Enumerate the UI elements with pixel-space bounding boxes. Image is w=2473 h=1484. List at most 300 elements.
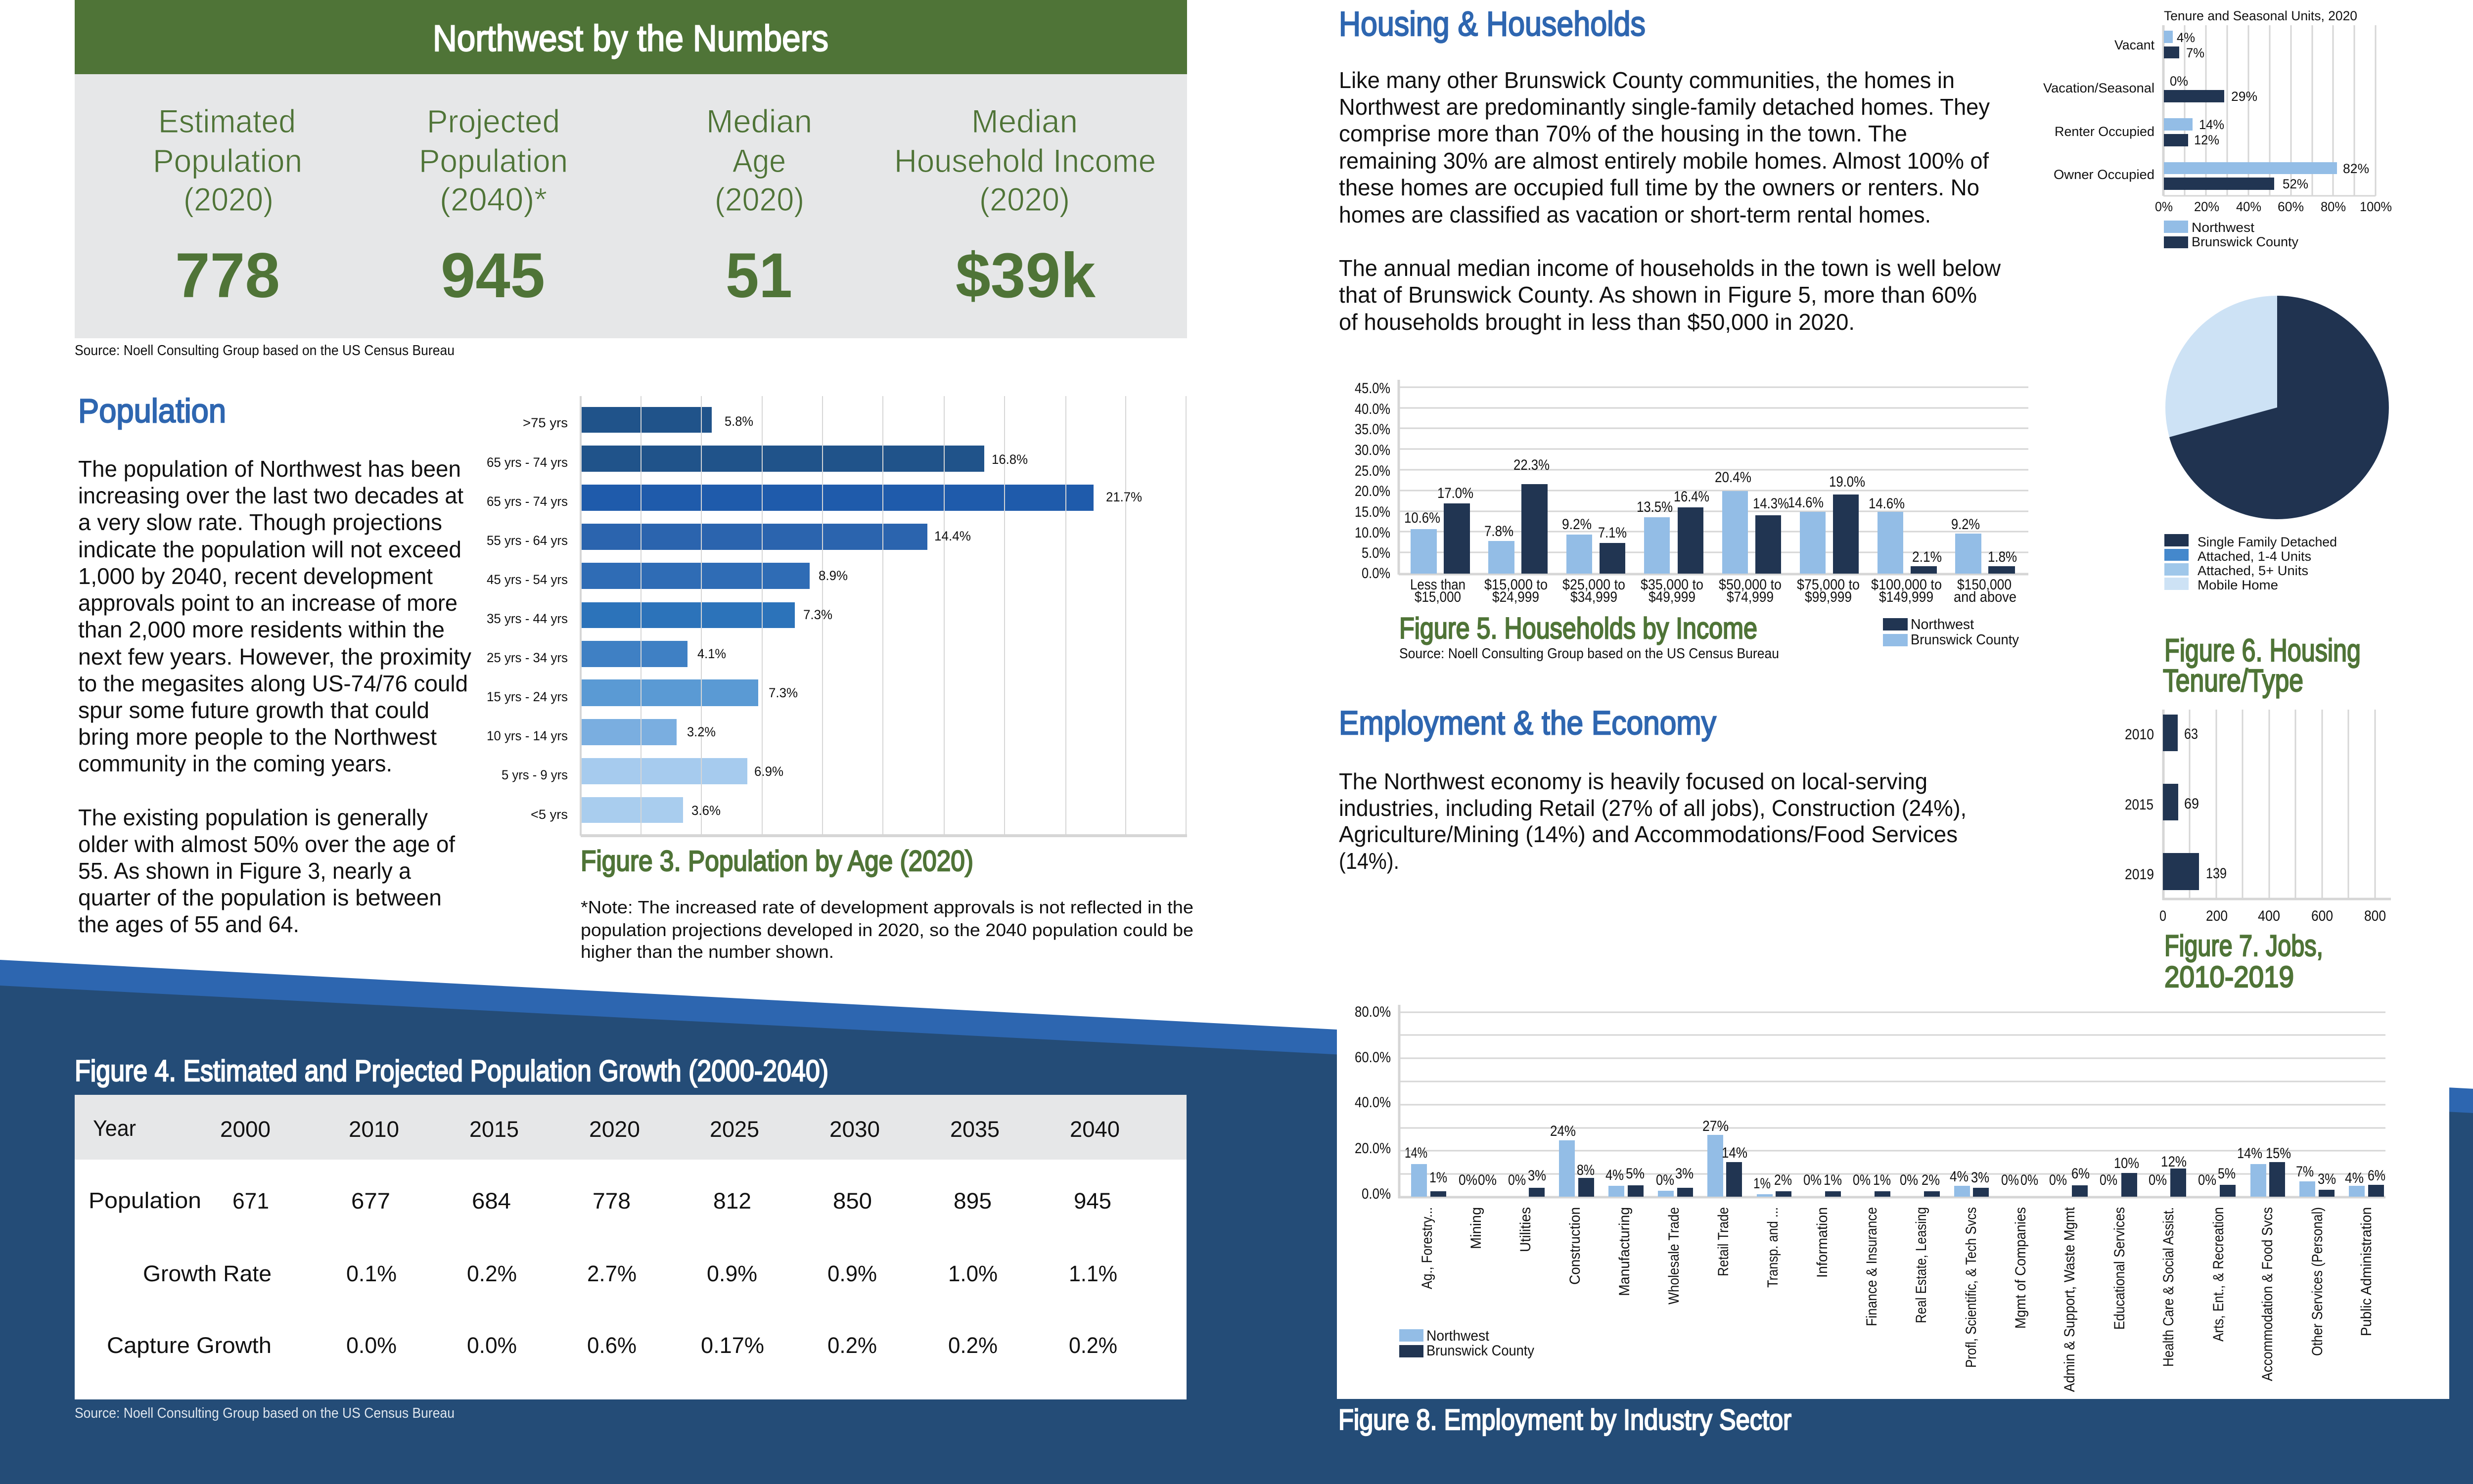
industry value labels: 12%	[2161, 1154, 2187, 1170]
industry legend	[1399, 1328, 1534, 1359]
heading: Figure 6	[2163, 632, 2361, 698]
industry value labels: 4%	[1950, 1169, 1969, 1185]
industry y axis labels: 40.0%	[1355, 1094, 1391, 1111]
text block: population narrative: the ages of 55 and 64.	[78, 911, 299, 937]
tenure axis labels: 100%	[2360, 199, 2392, 214]
table header row: 2030	[829, 1117, 880, 1142]
stat: median household income: Median	[971, 103, 1078, 139]
text block: employment narrative: Agriculture/Mining (14%) and Accommodations/Food Services	[1339, 821, 1958, 847]
text block: housing narrative: The annual median income of households in the town is well below	[1339, 255, 2001, 281]
industry value labels: 1%	[1753, 1175, 1771, 1192]
income y axis labels: 35.0%	[1355, 421, 1390, 438]
industry value labels: 27%	[1702, 1118, 1729, 1134]
row: population: 778	[593, 1188, 631, 1214]
age labels: 65 yrs - 74 yrs	[487, 455, 568, 470]
value labels: 8.9%	[819, 568, 848, 583]
title: Northwest by the Numbers	[433, 18, 828, 59]
tenure category labels: Vacant	[2114, 38, 2154, 52]
row: growth rate: 0.2%	[467, 1261, 517, 1286]
text block: development note	[581, 897, 1193, 962]
row: capture growth: Capture Growth	[107, 1333, 272, 1358]
heading: Figure 8: Figure 8. Employment by Industry Sector	[1338, 1404, 1791, 1436]
income category labels: $100,000 to	[1871, 577, 1942, 593]
industry bars: Northwest	[1411, 1135, 2365, 1197]
value labels: 14.4%	[934, 529, 971, 543]
text block: population narrative: The existing population is generally	[78, 805, 428, 830]
industry category labels	[1419, 1207, 2375, 1392]
table header row: 2015	[469, 1117, 519, 1142]
row: capture growth: 0.2%	[948, 1333, 998, 1358]
text block: population narrative: a very slow rate. Though projections	[78, 509, 442, 535]
row: population: Population	[89, 1188, 201, 1213]
age labels: <5 yrs	[531, 807, 568, 822]
table header row: 2000	[220, 1117, 271, 1142]
text block: housing narrative: Like many other Brunswick County communities, the homes in	[1339, 67, 1955, 93]
industry legend: Northwest	[1426, 1328, 1490, 1344]
pie legend: Mobile Home	[2198, 578, 2278, 592]
text block: population narrative: than 2,000 more residents within the	[78, 617, 445, 642]
value labels	[687, 414, 1142, 818]
income value labels: 7.8%	[1484, 523, 1513, 540]
industry bars: Brunswick County	[1430, 1162, 2384, 1197]
text block: population narrative	[78, 456, 471, 937]
industry category labels: Mining	[1468, 1207, 1484, 1249]
row: population: 812	[713, 1188, 751, 1214]
tenure value labels: 14%	[2199, 117, 2224, 132]
background: dark blue footer area	[0, 986, 2473, 1484]
row: growth rate: 1.0%	[948, 1261, 998, 1286]
value labels: 16.8%	[992, 452, 1028, 467]
row: growth rate: Growth Rate	[143, 1261, 272, 1286]
heading: Population: Population	[78, 392, 226, 430]
source note: Source: Noell Consulting Group based on the US Census Bureau	[75, 343, 455, 359]
source note figure 5: Source: Noell Consulting Group based on the US Census Bureau	[1399, 646, 1779, 662]
industry value labels: 14%	[2237, 1145, 2262, 1162]
bar chart: employment by industry	[1355, 1004, 2385, 1392]
income y axis labels: 15.0%	[1355, 504, 1390, 520]
value labels: 5.8%	[725, 414, 753, 429]
text block: population narrative: 55. As shown in Figure 3, nearly a	[78, 858, 411, 884]
industry y axis labels: 20.0%	[1355, 1140, 1391, 1157]
stat: projected population: Projected	[427, 103, 560, 139]
industry value labels: 3%	[1675, 1166, 1694, 1182]
age labels: 5 yrs - 9 yrs	[502, 767, 568, 782]
industry value labels	[1405, 1118, 2385, 1192]
stat: projected population: (2040)*	[440, 181, 547, 218]
stat: projected population: Population	[419, 142, 568, 179]
row: growth rate: 0.9%	[827, 1261, 877, 1286]
industry category labels: Other Services (Personal)	[2309, 1207, 2326, 1356]
job bars	[2163, 715, 2199, 890]
text block: housing narrative: that of Brunswick County. As shown in Figure 5, more than 60%	[1339, 282, 1977, 308]
age labels: 55 yrs - 64 yrs	[487, 533, 568, 548]
industry value labels: 0%	[1853, 1172, 1871, 1188]
age labels: 45 yrs - 54 yrs	[487, 572, 568, 587]
industry category labels: Arts, Ent., & Recreation	[2210, 1207, 2227, 1342]
industry value labels: 2%	[1922, 1172, 1940, 1188]
industry value labels: 0%	[2100, 1172, 2117, 1188]
income category labels: $74,999	[1727, 589, 1774, 605]
stat: median age: (2020)	[715, 181, 804, 218]
row: population: 677	[351, 1188, 390, 1214]
income category labels: $15,000 to	[1484, 577, 1548, 593]
table: population growth	[75, 1095, 1187, 1399]
stat: projected population	[419, 103, 568, 311]
income y axis labels: 0.0%	[1362, 565, 1390, 582]
text block: housing narrative: comprise more than 70% of the housing in the town. The	[1339, 121, 1907, 146]
row: capture growth: 0.2%	[827, 1333, 877, 1358]
income value labels	[1404, 457, 2017, 565]
income y axis labels: 45.0%	[1355, 380, 1390, 397]
income category labels: $15,000	[1415, 589, 1461, 605]
industry category labels: Real Estate, Leasing	[1913, 1207, 1929, 1323]
tenure axis labels	[2155, 199, 2392, 214]
row: capture growth: 0.17%	[701, 1333, 764, 1358]
text block: housing narrative: Northwest are predominantly single-family detached homes. They	[1339, 94, 1990, 120]
industry value labels: 1%	[1429, 1169, 1447, 1186]
job year labels: 2010	[2125, 726, 2154, 743]
text block: population narrative: spur some future growth that could	[78, 697, 429, 723]
text block: housing narrative: these homes are occupied full time by the owners or renters. No	[1339, 175, 1979, 200]
text block: population narrative: next few years. However, the proximity	[78, 644, 471, 670]
industry category labels: Admin & Support, Waste Mgmt	[2061, 1207, 2078, 1392]
age labels: 25 yrs - 34 yrs	[487, 650, 568, 665]
job axis labels: 200	[2206, 908, 2228, 924]
text block: housing narrative: remaining 30% are almost entirely mobile homes. Almost 100% of	[1339, 148, 1989, 174]
tenure value labels: 29%	[2231, 89, 2257, 104]
income value labels: 22.3%	[1513, 457, 1550, 473]
industry category labels: Wholesale Trade	[1666, 1207, 1682, 1304]
pie legend: Attached, 1-4 Units	[2198, 549, 2311, 564]
industry category labels: Utilities	[1517, 1207, 1534, 1252]
text block: population narrative: bring more people to the Northwest	[78, 724, 437, 750]
stat: median age: 51	[726, 240, 792, 311]
industry value labels: 0%	[2149, 1172, 2167, 1188]
heading: Figure 7: Figure 7. Jobs,	[2164, 929, 2323, 962]
income y axis labels: 5.0%	[1362, 545, 1390, 561]
tenure legend: Brunswick County	[2192, 234, 2298, 249]
stat: median age: Age	[733, 142, 786, 179]
text block: development note: population projections developed in 2020, so the 2040 population could be	[581, 920, 1193, 940]
industry y axis labels: 80.0%	[1355, 1004, 1391, 1020]
income category labels: $24,999	[1492, 589, 1539, 605]
bar chart: households by income	[1355, 380, 2028, 605]
industry value labels: 0%	[1508, 1172, 1526, 1188]
industry value labels: 8%	[1577, 1162, 1595, 1178]
row: growth rate: 0.9%	[707, 1261, 757, 1286]
text block: housing narrative	[1339, 67, 2001, 335]
job value labels: 63	[2184, 726, 2198, 742]
text block: population narrative: approvals point to an increase of more	[78, 590, 458, 616]
industry y axis labels: 0.0%	[1362, 1186, 1391, 1202]
stats background	[75, 74, 1187, 338]
industry category labels: Mgmt of Companies	[2013, 1207, 2029, 1329]
banner	[75, 0, 1187, 74]
table header row	[75, 1095, 1187, 1160]
income category labels: $49,999	[1649, 589, 1695, 605]
industry value labels: 6%	[2071, 1166, 2090, 1182]
industry value labels: 3%	[2318, 1171, 2336, 1187]
income category labels: $35,000 to	[1641, 577, 1703, 593]
value labels: 4.1%	[697, 646, 726, 661]
tenure category labels: Renter Occupied	[2055, 124, 2154, 139]
income y axis labels: 40.0%	[1355, 401, 1390, 417]
income category labels: $150,000	[1957, 577, 2012, 593]
text block: population narrative: indicate the population will not exceed	[78, 537, 461, 562]
job value labels: 69	[2184, 796, 2199, 812]
tenure axis labels: 40%	[2236, 199, 2261, 214]
industry value labels: 1%	[1873, 1172, 1891, 1188]
income y axis labels: 10.0%	[1355, 525, 1390, 541]
tenure legend	[2164, 220, 2298, 249]
age labels: >75 yrs	[523, 415, 568, 430]
text block: employment narrative	[1339, 768, 1967, 874]
stat: median household income: (2020)	[979, 181, 1070, 218]
income value labels: 13.5%	[1637, 499, 1673, 515]
income category labels	[1410, 577, 2016, 605]
industry value labels: 0%	[2020, 1172, 2038, 1188]
industry category labels: Ag., Forestry...	[1419, 1207, 1435, 1289]
income category labels: $149,999	[1879, 589, 1933, 605]
income y axis labels: 30.0%	[1355, 442, 1390, 458]
income legend: Brunswick County	[1911, 632, 2019, 648]
industry value labels: 4%	[1605, 1167, 1624, 1183]
income value labels: 7.1%	[1598, 525, 1627, 541]
tenure value labels	[2170, 30, 2369, 191]
industry value labels: 4%	[2345, 1170, 2364, 1186]
job year labels: 2015	[2125, 797, 2153, 813]
value labels: 7.3%	[803, 607, 832, 622]
age labels: 15 yrs - 24 yrs	[487, 689, 568, 704]
bar chart: jobs 2010-2019	[2125, 710, 2391, 924]
stat: estimated population: Population	[153, 142, 302, 179]
income value labels: 19.0%	[1829, 474, 1865, 490]
table header row: 2020	[589, 1117, 640, 1142]
age labels: 35 yrs - 44 yrs	[487, 611, 568, 626]
text block: population narrative: quarter of the population is between	[78, 885, 442, 910]
income bars	[1411, 484, 2015, 574]
pie legend: Attached, 5+ Units	[2198, 563, 2308, 578]
tenure value labels: 7%	[2186, 45, 2204, 60]
row: capture growth: 0.0%	[346, 1333, 397, 1358]
income value labels: 9.2%	[1562, 516, 1592, 533]
age labels: 10 yrs - 14 yrs	[487, 728, 568, 743]
text block: population narrative: community in the coming years.	[78, 751, 392, 776]
stat: estimated population: (2020)	[183, 181, 274, 218]
tenure value labels: 82%	[2343, 161, 2369, 176]
row: capture growth	[107, 1333, 1117, 1358]
industry category labels: Construction	[1567, 1207, 1583, 1285]
row: population: 671	[232, 1188, 269, 1214]
text block: population narrative: The population of Northwest has been	[78, 456, 461, 482]
job axis labels: 600	[2311, 908, 2333, 924]
tenure category labels	[2043, 38, 2154, 182]
age labels: 65 yrs - 74 yrs	[487, 494, 568, 509]
industry value labels: 0%	[1656, 1172, 1674, 1188]
row: population: 850	[833, 1188, 872, 1214]
heading: Figure 7: 2010-2019	[2164, 960, 2294, 993]
industry value labels: 0%	[2198, 1172, 2216, 1188]
stat: estimated population: Estimated	[158, 103, 296, 139]
heading: Figure 6: Tenure/Type	[2163, 663, 2303, 698]
industry category labels: Information	[1814, 1207, 1831, 1278]
job year labels: 2019	[2125, 866, 2154, 883]
income value labels: 14.3%	[1753, 495, 1789, 512]
tenure axis labels: 60%	[2278, 199, 2304, 214]
industry value labels: 0%	[2049, 1172, 2067, 1188]
income category labels: $34,999	[1570, 589, 1617, 605]
pie legend: Single Family Detached	[2198, 535, 2337, 549]
industry value labels: 1%	[1824, 1172, 1842, 1188]
heading: Figure 7	[2164, 929, 2323, 993]
tenure axis labels: 0%	[2155, 199, 2173, 214]
tenure value labels: 52%	[2283, 177, 2308, 191]
income y axis labels: 20.0%	[1355, 483, 1390, 499]
value labels: 6.9%	[754, 764, 783, 779]
income legend	[1883, 617, 2019, 648]
stat: median age	[706, 103, 812, 311]
bar chart: population by age	[487, 396, 1187, 836]
row: growth rate: 1.1%	[1069, 1261, 1117, 1286]
income legend: Northwest	[1911, 617, 1974, 632]
text block: employment narrative: (14%).	[1339, 848, 1399, 874]
text block: employment narrative: The Northwest economy is heavily focused on local-serving	[1339, 768, 1927, 794]
value labels: 3.6%	[691, 803, 721, 818]
heading: Housing & Households: Housing & Households	[1339, 4, 1646, 43]
industry value labels: 5%	[2218, 1166, 2236, 1182]
industry value labels: 24%	[1550, 1123, 1576, 1139]
bar chart: tenure and seasonal units	[2043, 8, 2392, 249]
table header row: 2035	[950, 1117, 1000, 1142]
pie chart: housing type	[2165, 296, 2389, 519]
stat: median household income	[894, 103, 1156, 311]
income category labels: $75,000 to	[1797, 577, 1860, 593]
industry y axis labels	[1355, 1004, 1391, 1202]
table header row: 2010	[349, 1117, 399, 1142]
industry category labels: Finance & Insurance	[1864, 1207, 1880, 1326]
industry value labels: 0%	[2001, 1172, 2019, 1188]
industry category labels: Profl, Scientific, & Tech Svcs	[1963, 1207, 1979, 1368]
text block: population narrative: increasing over the last two decades at	[78, 483, 463, 508]
job axis labels: 0	[2159, 908, 2166, 924]
stat: median household income: Household Income	[894, 142, 1156, 179]
industry category labels: Educational Services	[2111, 1207, 2128, 1330]
text block: employment narrative: industries, including Retail (27% of all jobs), Construction (24%),	[1339, 795, 1967, 821]
heading: Figure 4: Figure 4. Estimated and Projected Population Growth (2000-2040)	[75, 1054, 828, 1087]
stat: projected population: 945	[441, 240, 545, 311]
heading: Figure 3: Figure 3. Population by Age (2020)	[581, 845, 973, 877]
row: population: 684	[472, 1188, 511, 1214]
income category labels: $25,000 to	[1562, 577, 1625, 593]
tenure legend: Northwest	[2192, 220, 2255, 235]
tenure bars	[2164, 31, 2337, 190]
tenure value labels: 12%	[2194, 133, 2219, 147]
industry category labels: Accommodation & Food Svcs	[2259, 1207, 2276, 1381]
industry value labels: 0%	[1900, 1172, 1918, 1188]
bars	[581, 407, 1094, 823]
table header row: Year	[93, 1116, 136, 1141]
job axis labels: 400	[2258, 908, 2280, 924]
industry value labels: 0%	[1803, 1172, 1822, 1188]
tenure value labels: 0%	[2170, 74, 2188, 89]
row: growth rate	[143, 1261, 1117, 1286]
row: growth rate: 0.1%	[346, 1261, 397, 1286]
panel: Northwest by the Numbers	[75, 0, 1187, 338]
income value labels: 1.8%	[1988, 549, 2017, 565]
industry value labels: 14%	[1722, 1145, 1747, 1161]
job axis labels	[2159, 908, 2386, 924]
industry value labels: 10%	[2114, 1155, 2139, 1171]
heading: Employment & the Economy: Employment & the Economy	[1339, 704, 1716, 742]
income category labels: Less than	[1410, 577, 1465, 593]
row: growth rate: 2.7%	[587, 1261, 637, 1286]
job value labels	[2184, 726, 2227, 882]
industry category labels: Retail Trade	[1715, 1207, 1732, 1276]
industry value labels: 14%	[1405, 1145, 1427, 1161]
income value labels: 16.4%	[1674, 489, 1709, 505]
industry value labels: 3%	[1971, 1169, 1989, 1186]
tenure value labels: 4%	[2177, 30, 2195, 45]
table header row: 2040	[1070, 1117, 1120, 1142]
income value labels: 2.1%	[1912, 549, 1942, 565]
text block: population narrative: to the megasites along US-74/76 could	[78, 671, 468, 696]
age labels	[487, 415, 568, 822]
tenure axis labels: 80%	[2321, 199, 2346, 214]
stat: estimated population: 778	[175, 240, 280, 311]
industry y axis labels: 60.0%	[1355, 1049, 1391, 1066]
job year labels	[2125, 726, 2154, 883]
value labels: 21.7%	[1106, 490, 1142, 504]
table header row: 2025	[710, 1117, 759, 1142]
industry value labels: 5%	[1626, 1166, 1645, 1182]
industry category labels: Public Administration	[2358, 1207, 2375, 1336]
income value labels: 14.6%	[1869, 495, 1905, 512]
heading: Figure 6: Figure 6. Housing	[2164, 632, 2361, 668]
panel: employment chart background	[1337, 996, 2449, 1399]
job axis labels: 800	[2364, 908, 2386, 924]
industry value labels: 6%	[2368, 1168, 2385, 1184]
income y axis labels: 25.0%	[1355, 463, 1390, 479]
row: population	[89, 1188, 1111, 1214]
stat: median household income: $39k	[956, 240, 1096, 311]
income value labels: 17.0%	[1437, 485, 1473, 501]
tenure category labels: Vacation/Seasonal	[2043, 81, 2154, 95]
text block: housing narrative: of households brought in less than $50,000 in 2020.	[1339, 309, 1855, 335]
industry category labels: Health Care & Social Assist.	[2160, 1207, 2177, 1367]
value labels: 7.3%	[769, 685, 798, 700]
job value labels: 139	[2206, 865, 2227, 882]
value labels: 3.2%	[687, 724, 716, 739]
background: light blue diagonal band	[0, 960, 2473, 1137]
row: capture growth: 0.2%	[1069, 1333, 1117, 1358]
source note under table: Source: Noell Consulting Group based on the US Census Bureau	[75, 1405, 455, 1421]
heading: Figure 5: Figure 5. Households by Income	[1399, 612, 1757, 645]
tenure category labels: Owner Occupied	[2054, 167, 2154, 182]
industry legend: Brunswick County	[1426, 1343, 1534, 1359]
industry category labels: Manufacturing	[1616, 1207, 1633, 1296]
tenure axis labels: 20%	[2194, 199, 2219, 214]
chart title: Tenure and Seasonal Units, 2020	[2164, 8, 2357, 23]
income category labels: $50,000 to	[1719, 577, 1782, 593]
industry value labels: 15%	[2266, 1145, 2291, 1162]
industry value labels: 2%	[1774, 1172, 1792, 1188]
text block: population narrative: 1,000 by 2040, recent development	[78, 563, 433, 589]
text block: development note: higher than the number shown.	[581, 942, 834, 962]
income category labels: $99,999	[1805, 589, 1852, 605]
industry value labels: 3%	[1528, 1168, 1546, 1184]
industry value labels: 0%	[1478, 1172, 1497, 1188]
stat: estimated population	[153, 103, 302, 311]
